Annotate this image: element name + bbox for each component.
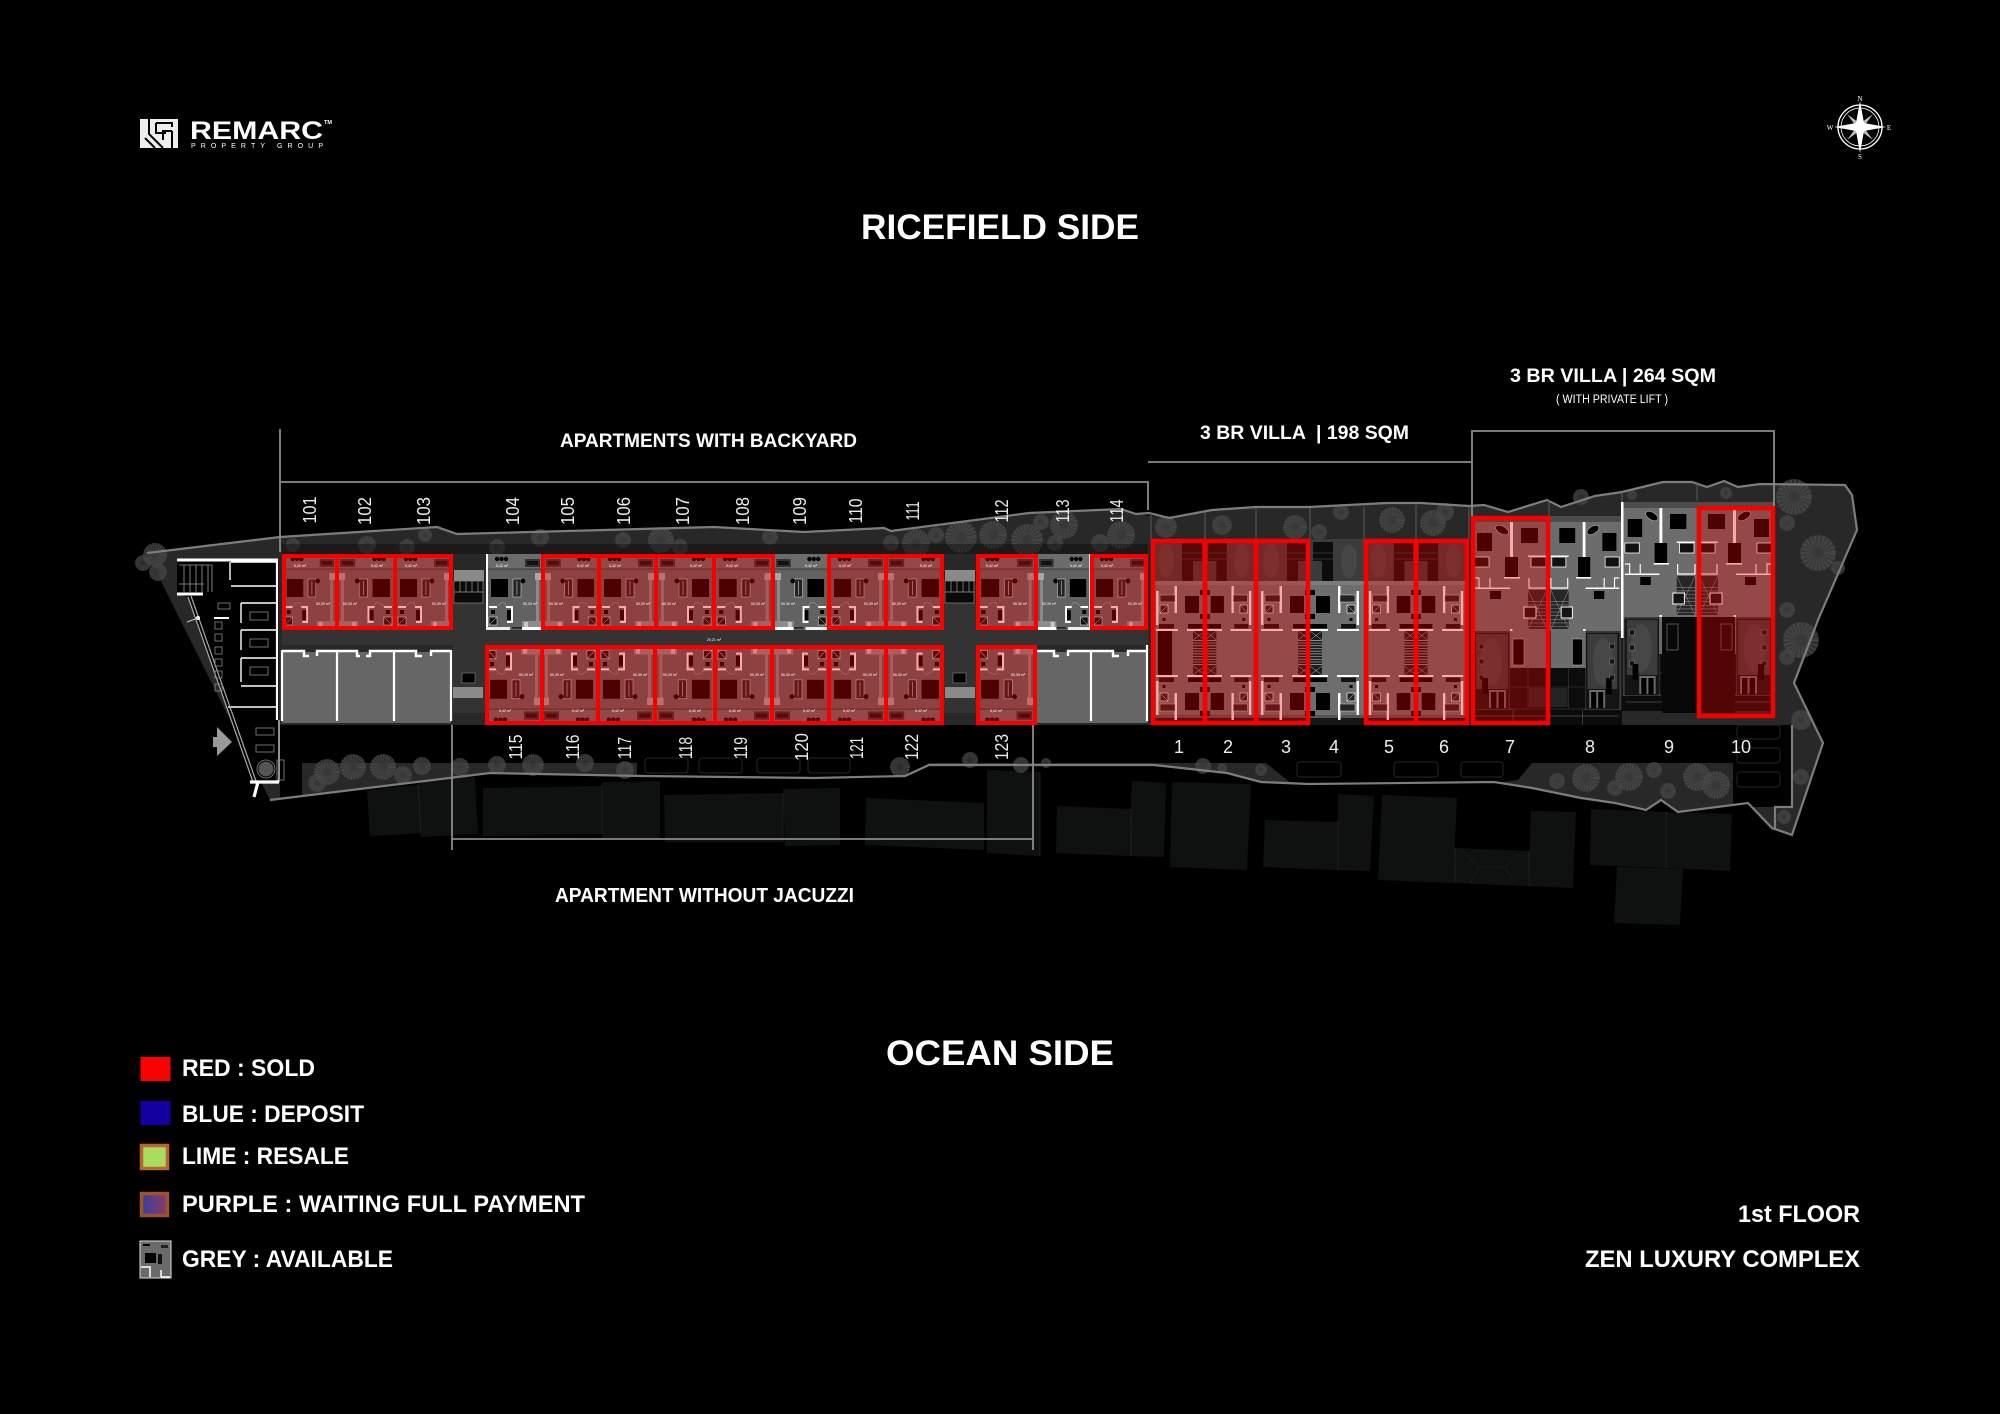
small area labels: 5,42 m² [843,709,856,713]
small area labels: 5,42 m² [499,709,512,713]
villa numbers 1-10: 10 [1731,737,1751,757]
unit numbers 115-123: 121 [847,737,867,759]
unit numbers 115-123: 118 [676,737,696,759]
small area labels: 50,39 m² [1042,602,1057,606]
unit numbers 101-114: 112 [992,500,1012,522]
small area labels: 5,42 m² [990,709,1003,713]
label: apartments with backyard: APARTMENTS WITH BACKYARD [560,430,857,452]
note: with private lift: ( WITH PRIVATE LIFT ) [1556,394,1668,406]
small area labels: 5,42 m² [839,564,852,568]
unit numbers 101-114: 106 [614,497,634,525]
small area labels: 50,39 m² [864,602,879,606]
small area labels: 5,42 m² [1101,564,1114,568]
unit numbers 115-123: 123 [992,734,1012,760]
small area labels: 5,42 m² [726,564,739,568]
small area labels: 50,39 m² [892,602,907,606]
small area labels: 50,39 m² [633,673,648,677]
small area labels: 5,42 m² [920,564,933,568]
unit numbers 115-123: 115 [506,734,526,760]
unit numbers 101-114: 104 [503,497,523,525]
label: 3 BR villa 264 sqm [1510,365,1716,406]
label: apartment without jacuzzi: APARTMENT WITHOUT JACUZZI [555,885,854,907]
small area labels: 5,42 m² [405,564,418,568]
unit numbers 101-114: 103 [414,497,434,525]
logo tagline: PROPERTY GROUP [191,143,323,150]
small area labels: 5,42 m² [986,564,999,568]
small area labels: 5,42 m² [915,709,928,713]
icon: compass rose: S [1858,153,1862,161]
unit numbers 115-123: 116 [563,734,583,760]
legend: blue deposit: BLUE : DEPOSIT [182,1101,364,1128]
legend: lime resale: LIME : RESALE [182,1143,349,1170]
unit numbers 101-114: 108 [733,497,753,525]
villa numbers 1-10: 7 [1505,737,1515,757]
small area labels: 50,39 m² [343,602,358,606]
site ground and gardens [147,481,1857,835]
villa numbers 1-10: 5 [1384,737,1394,757]
small area labels: 50,39 m² [636,602,651,606]
central corridor [282,570,1148,713]
logo wordmark: REMARC [190,117,323,145]
small area labels: 50,39 m² [316,602,331,606]
villa numbers 1-10: 6 [1439,737,1449,757]
small area labels: 50,39 m² [750,673,765,677]
small area labels: 50,39 m² [1013,602,1028,606]
small area labels: 5,42 m² [689,709,702,713]
small area labels: 5,42 m² [612,709,625,713]
heading: ricefield side: RICEFIELD SIDE [861,208,1139,247]
unit numbers 101-114: 110 [846,498,866,524]
small area labels: 20,21 m² [707,638,722,642]
small area labels: 5,42 m² [805,564,818,568]
legend: grey available [140,1241,393,1278]
small area labels: 5,42 m² [577,564,590,568]
small area labels: 5,42 m² [690,564,703,568]
neighbouring buildings [367,770,1732,925]
dimension bracket: apartment without jacuzzi [452,725,1033,850]
grey backyard units, right block [1036,645,1148,723]
unit numbers 115-123: 122 [902,734,922,760]
small area labels: 5,42 m² [609,564,622,568]
legend [140,1055,585,1278]
sold units overlay: apartments [284,556,1146,723]
floor label: 1st FLOOR [1738,1201,1860,1228]
icon: compass rose [1827,95,1891,161]
unit numbers 115-123: 120 [792,733,812,761]
logo [140,117,332,150]
villa numbers 1-10: 8 [1585,737,1595,757]
villas 1-6 plans [1151,505,1469,725]
entrance building, left [177,560,284,797]
small area labels: 5,42 m² [572,709,585,713]
small area labels: 50,39 m² [549,602,564,606]
small area labels: 50,39 m² [550,673,565,677]
unit numbers 115-123 [506,733,1012,761]
legend: grey available: GREY : AVAILABLE [182,1246,393,1273]
site boundary outline [147,481,1857,835]
apartments, ocean row: 115-123 [485,645,1035,725]
project name: ZEN LUXURY COMPLEX [1585,1246,1860,1273]
label: 3 BR villa 264 sqm: 3 BR VILLA | 264 SQM [1510,365,1716,387]
small area labels: 5,42 m² [496,564,509,568]
small area labels: 50,39 m² [663,673,678,677]
small area labels: 50,39 m² [662,602,677,606]
small area labels: 5,42 m² [1070,564,1083,568]
villa numbers 1-10 [1174,737,1751,757]
unit numbers 101-114: 114 [1107,500,1127,522]
icon: compass rose: E [1887,124,1891,132]
small area labels: 5,42 m² [294,564,307,568]
parking boundary line [1775,725,1792,828]
small area labels: 50,39 m² [519,673,534,677]
unit numbers 101-114 [300,496,1127,525]
legend: red sold: RED : SOLD [182,1055,315,1082]
unit numbers 101-114: 105 [558,497,578,525]
unit numbers 101-114: 111 [903,502,923,520]
dimension bracket: 3 BR villa 264 sqm [1472,431,1774,516]
unit numbers 101-114: 109 [790,497,810,525]
unit numbers 101-114: 107 [673,497,693,525]
small area labels: 5,42 m² [371,564,384,568]
small area labels: 50,39 m² [781,673,796,677]
apartments, ricefield row: 101-114 [282,554,1148,630]
parking strip [280,725,1792,807]
icon: compass rose: W [1827,124,1834,132]
small area labels [294,564,1143,713]
unit numbers 101-114: 101 [300,496,320,524]
villas 7-10 plans [1471,482,1775,725]
villa numbers 1-10: 9 [1664,737,1674,757]
icon: Remarc mark [140,119,178,148]
unit numbers 115-123: 119 [731,737,751,759]
small area labels: 50,39 m² [1128,602,1143,606]
small area labels: 50,39 m² [751,602,766,606]
unit numbers 115-123: 117 [615,737,635,759]
icon: compass rose: N [1857,95,1863,103]
small area labels: 50,39 m² [863,673,878,677]
small area labels: 50,39 m² [893,673,908,677]
icon: entrance arrow [213,727,232,756]
small area labels: 50,39 m² [1011,673,1026,677]
unit numbers 101-114: 113 [1053,500,1073,522]
villa numbers 1-10: 2 [1223,737,1233,757]
small area labels: 50,39 m² [523,602,538,606]
small area labels: 5,42 m² [803,709,816,713]
villa numbers 1-10: 4 [1329,737,1339,757]
unit numbers 101-114: 102 [355,497,375,525]
logo trademark: TM [324,120,332,126]
dimension bracket: apartments with backyard [280,429,1148,552]
small area labels: 5,42 m² [729,709,742,713]
villa numbers 1-10: 3 [1281,737,1291,757]
legend: purple waiting full payment: PURPLE : WAITING FULL PAYMENT [182,1191,585,1218]
sold units overlay: villas [1153,508,1773,723]
grey backyard units, left block [282,650,451,723]
label: 3 BR villa 198 sqm: 3 BR VILLA | 198 SQM [1200,422,1409,444]
dimension bracket: 3 BR villa 198 sqm [1148,461,1472,463]
car parking outlines [645,725,1780,787]
small area labels: 50,39 m² [432,602,447,606]
trees [135,479,1845,824]
villa numbers 1-10: 1 [1174,737,1184,757]
small area labels: 50,39 m² [781,602,796,606]
heading: ocean side: OCEAN SIDE [886,1034,1114,1073]
